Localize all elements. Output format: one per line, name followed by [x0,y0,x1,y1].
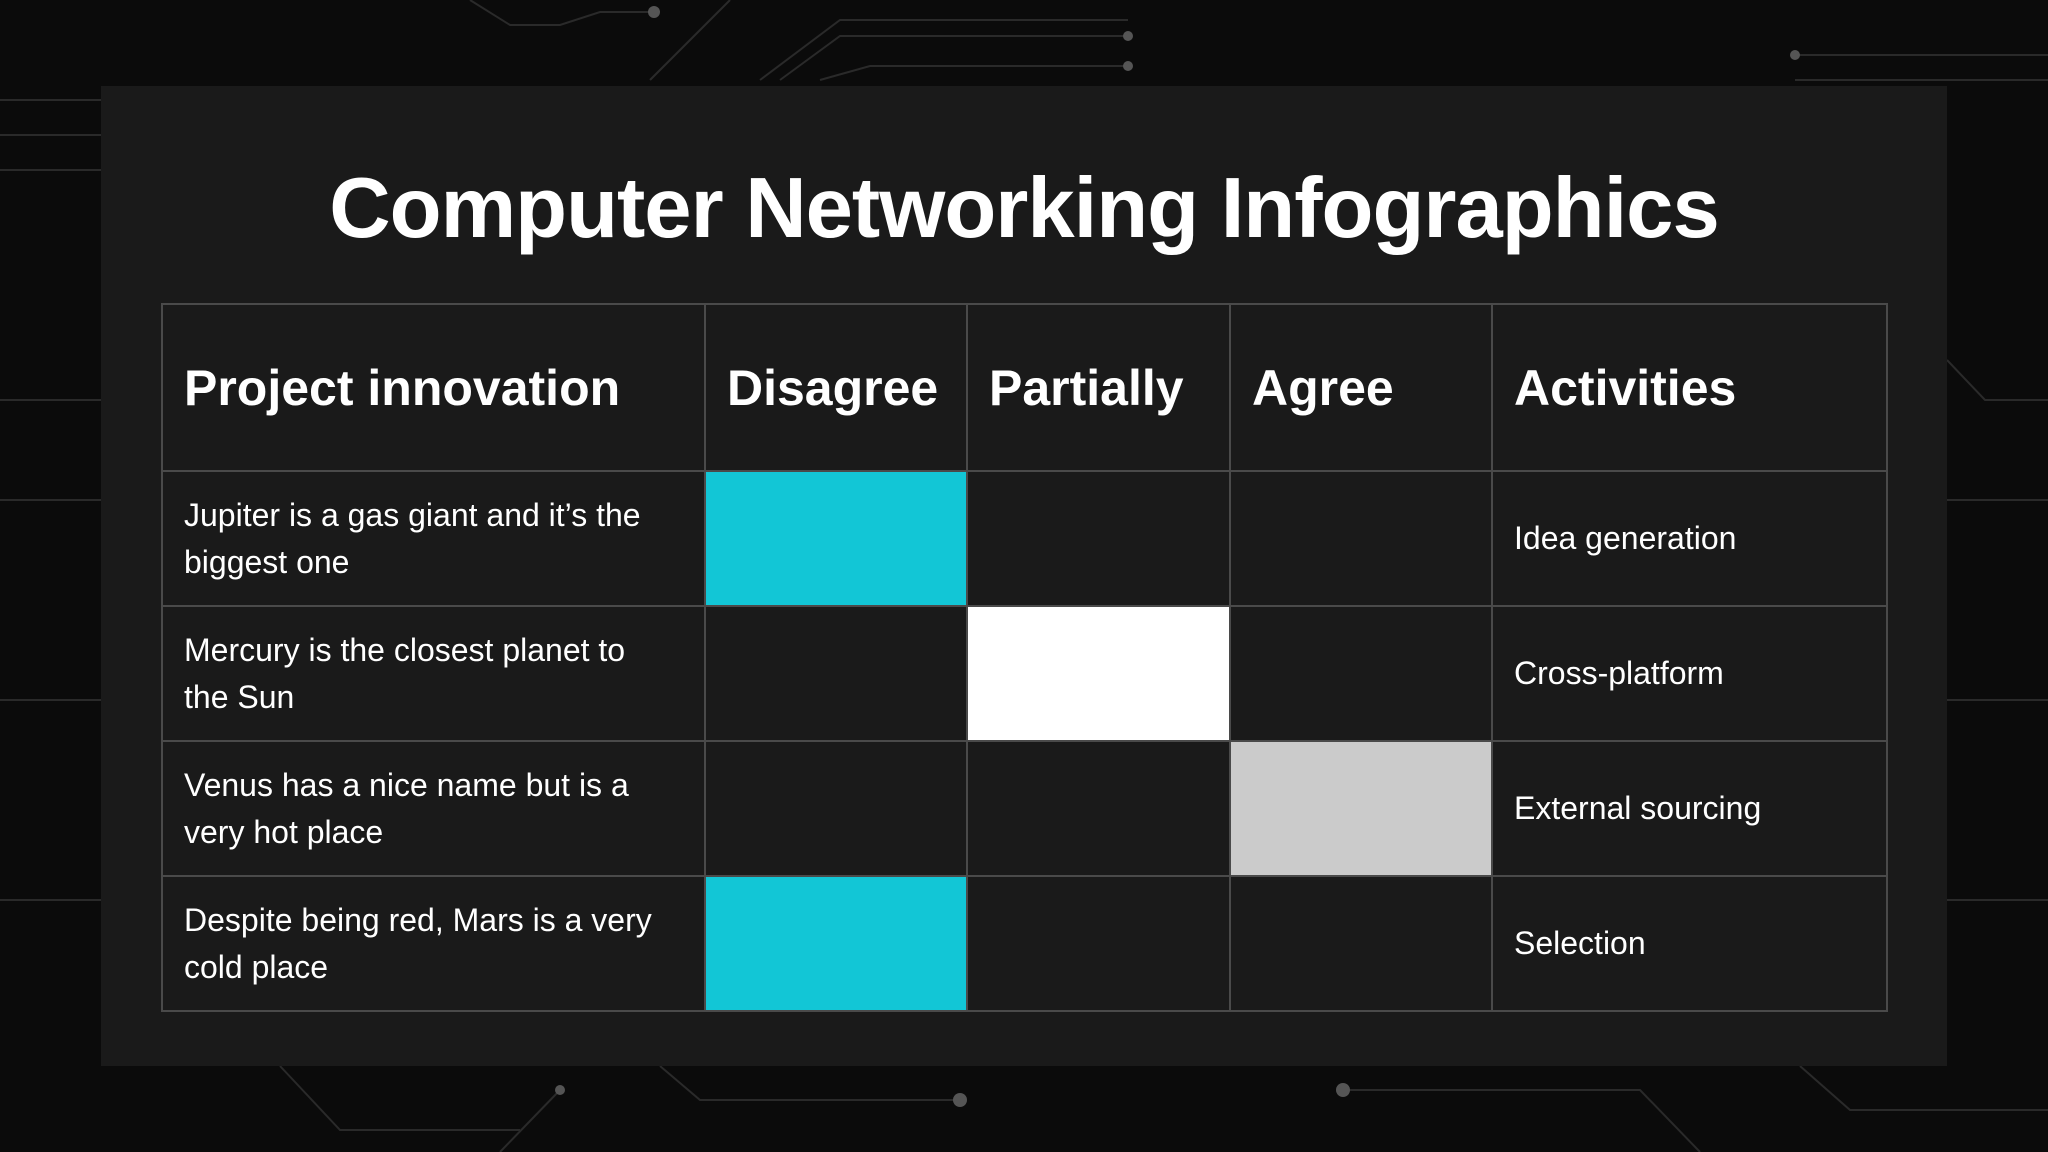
table: project innovation rating [161,303,1888,1012]
table: project innovation rating: Jupiter is a gas giant and it’s the [184,496,641,532]
table: project innovation rating: Selection [1514,925,1646,961]
table: project innovation rating: Partially [989,360,1184,416]
table: project innovation rating: Venus has a nice name but is a [184,766,629,802]
table: project innovation rating: very hot place [184,814,383,850]
table: project innovation rating: the Sun [184,678,294,714]
table: project innovation rating: Project innovation [184,360,620,416]
table: project innovation rating: Disagree [727,360,938,416]
table: project innovation rating: Mercury is the closest planet to [184,632,625,668]
table: project innovation rating: biggest one [184,544,349,580]
table: project innovation rating: cold place [184,948,328,984]
table: project innovation rating: Agree [1252,360,1394,416]
table: project innovation rating: External sourcing [1514,790,1761,826]
title: Computer Networking Infographics [329,161,1719,256]
table: project innovation rating: Activities [1514,360,1736,416]
table: project innovation rating: Despite being red, Mars is a very [184,902,652,938]
table: project innovation rating: Idea generation [1514,520,1736,556]
table: project innovation rating: Cross-platform [1514,655,1724,691]
panel: main card [101,86,1947,1066]
